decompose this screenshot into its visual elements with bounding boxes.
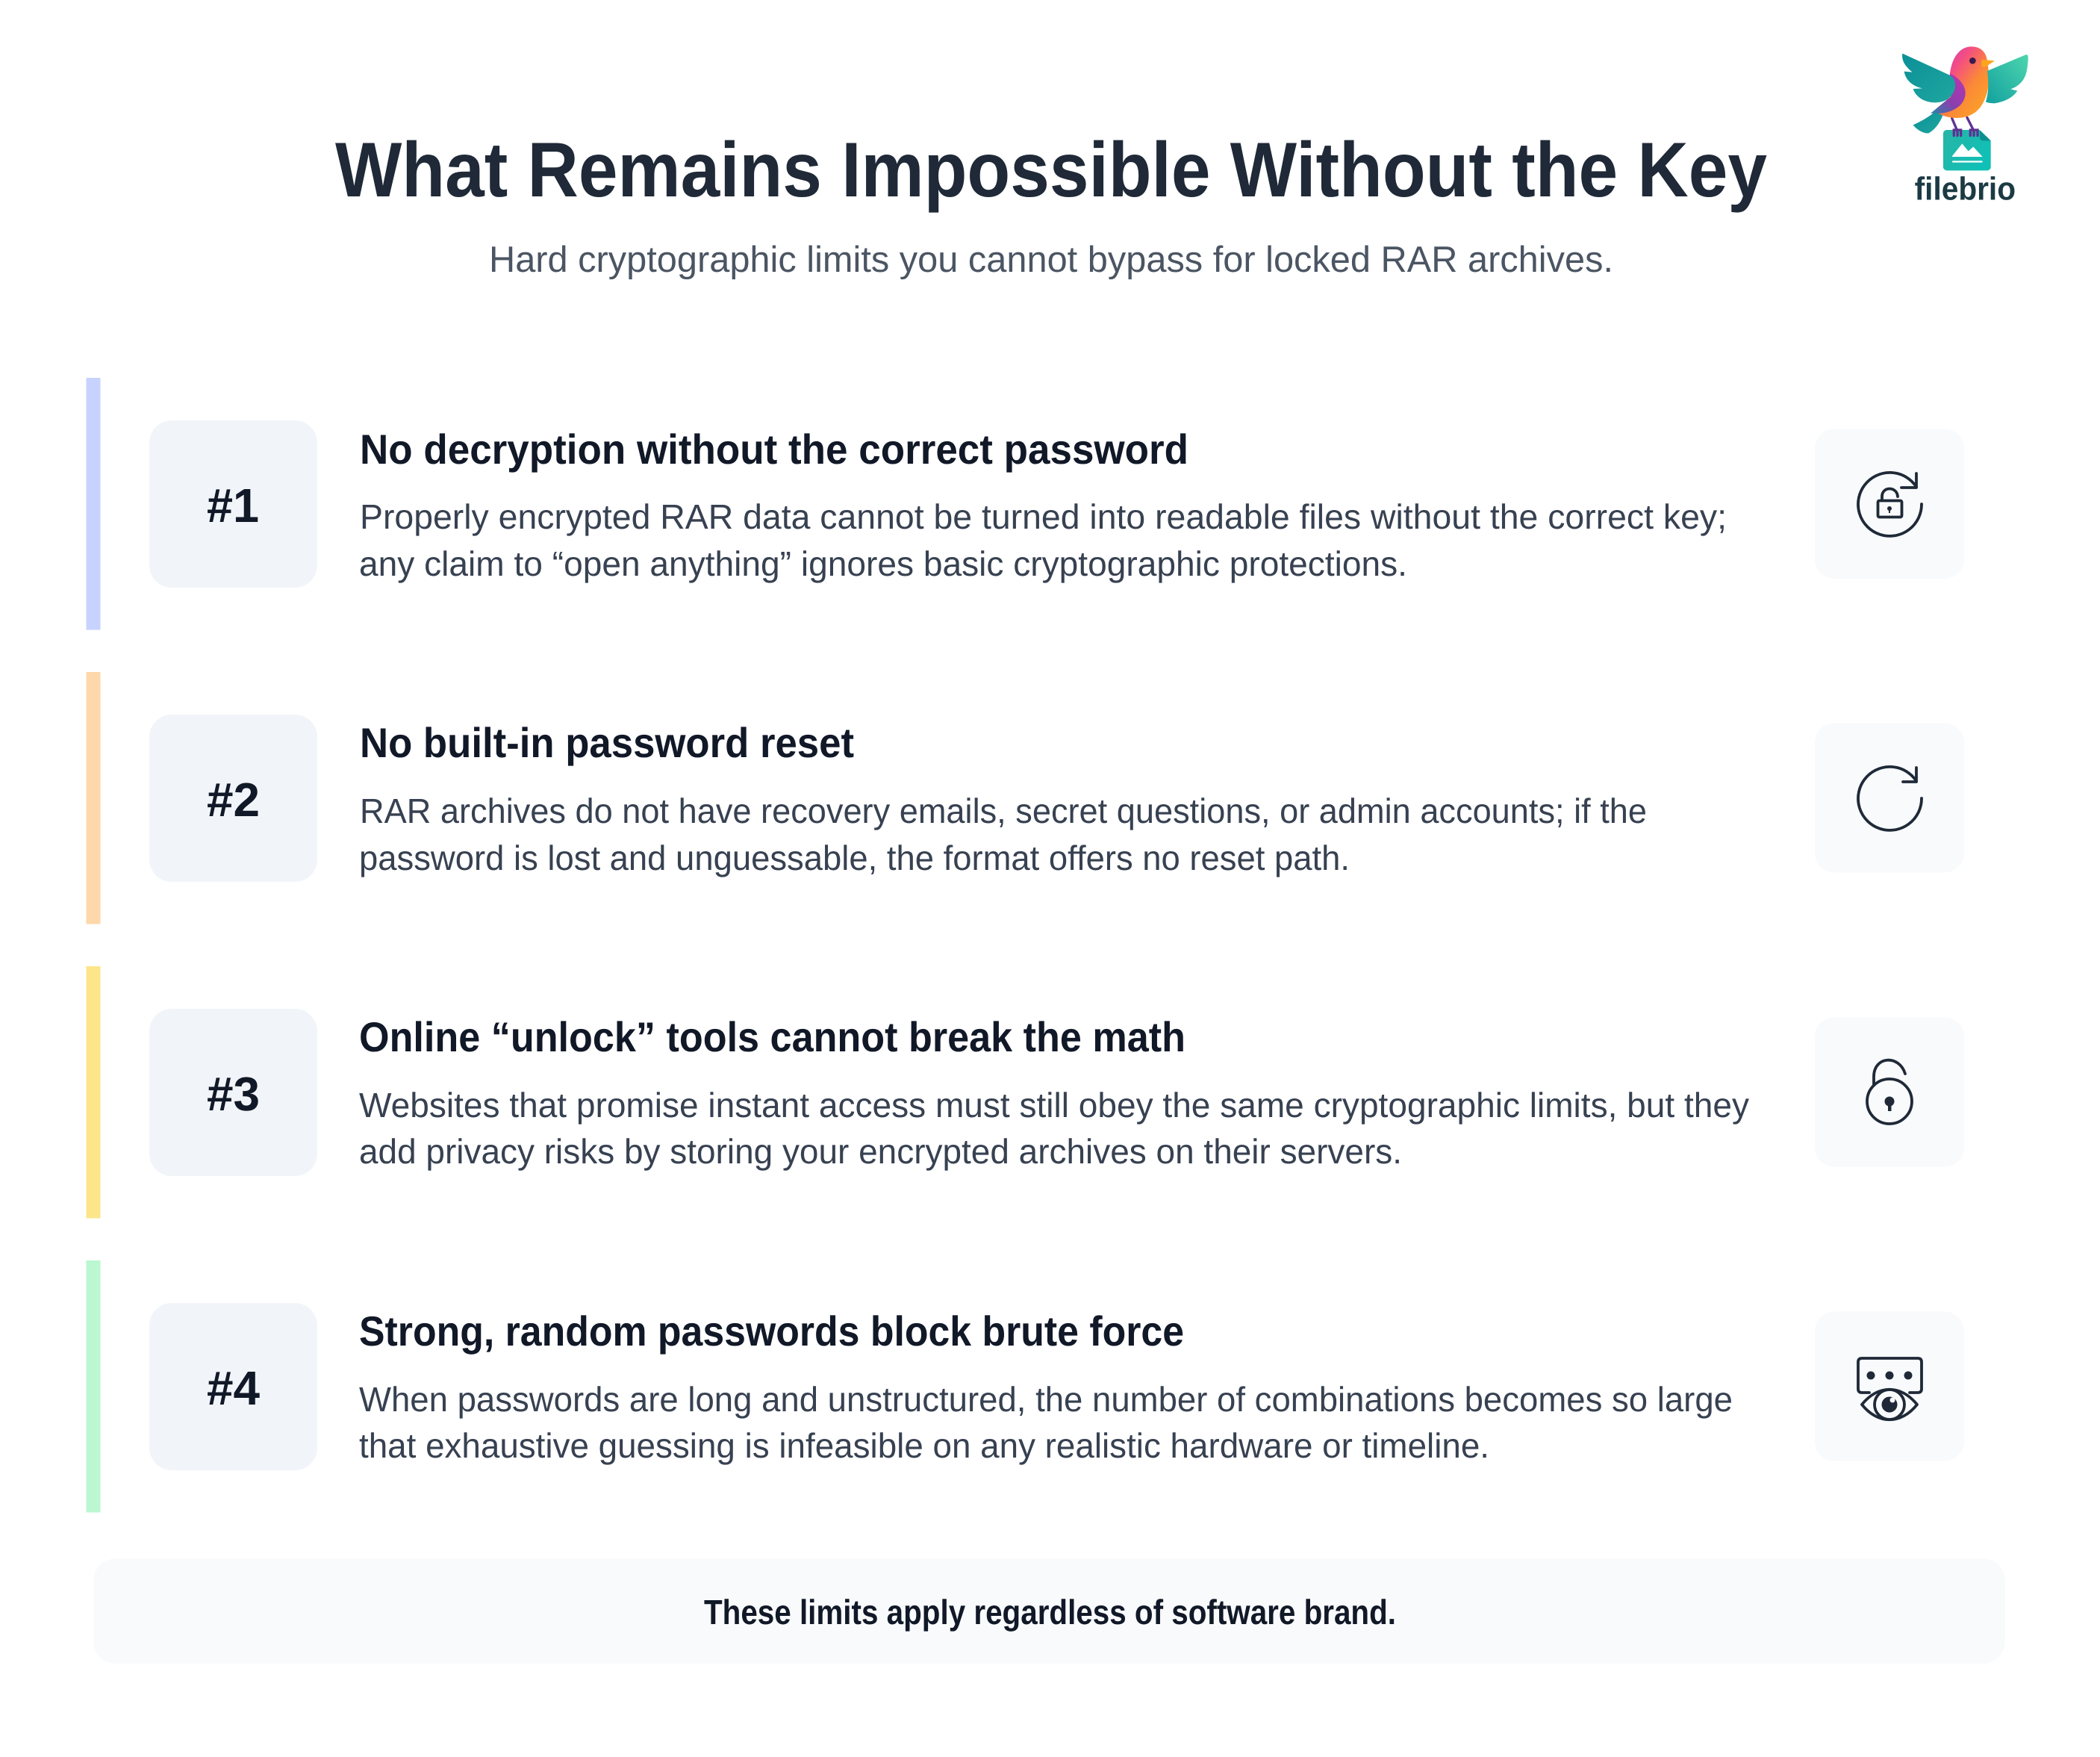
body text 3: add privacy risks by storing your encrypted archives on their servers. xyxy=(359,1132,1402,1171)
panel: item 3 xyxy=(87,966,1964,1219)
body text 2: password is lost and unguessable, the format offers no reset path. xyxy=(359,839,1350,877)
logo wordmark: filebrio xyxy=(1915,170,2016,207)
icon: legs xyxy=(1952,117,1978,136)
icon: right wing xyxy=(1986,55,2028,103)
icon: eye xyxy=(1969,57,1976,64)
body text 1: Properly encrypted RAR data cannot be turned into readable files without the correct key; xyxy=(360,497,1727,536)
title: What Remains Impossible Without the Key xyxy=(335,127,1767,214)
heading 3: Online “unlock” tools cannot break the math xyxy=(359,1013,1185,1060)
body text 1 xyxy=(359,497,1727,583)
heading 2: No built-in password reset xyxy=(360,719,854,766)
subtitle: Hard cryptographic limits you cannot bypass for locked RAR archives. xyxy=(489,240,1613,280)
logo: filebrio bird xyxy=(1902,46,2028,207)
icon: tail xyxy=(1913,111,1943,133)
body text 3 xyxy=(359,1086,1750,1171)
body text 4 xyxy=(359,1380,1733,1465)
icon: file xyxy=(1943,130,1991,170)
icon box: reset arrow xyxy=(1815,723,1964,872)
heading 4: Strong, random passwords block brute force xyxy=(359,1307,1184,1355)
heading 1: No decryption without the correct password xyxy=(360,426,1188,473)
accent bar 2 xyxy=(87,672,100,924)
number badge 1: #1 xyxy=(207,479,259,532)
icon box: password eye xyxy=(1815,1311,1964,1461)
icon: left wing xyxy=(1902,54,1955,102)
icon: bird body xyxy=(1939,46,1989,118)
body text 4: When passwords are long and unstructured, the number of combinations becomes so large xyxy=(359,1380,1733,1419)
body text 1: any claim to “open anything” ignores basic cryptographic protections. xyxy=(359,544,1407,583)
accent bar 1 xyxy=(87,378,100,630)
number badge 1 xyxy=(149,420,317,588)
number badge 4 xyxy=(149,1303,317,1470)
icon box: open padlock xyxy=(1815,1017,1964,1166)
icon: wing stripe xyxy=(1931,73,1966,113)
footer callout xyxy=(93,1559,2005,1664)
accent bar 3 xyxy=(87,966,100,1219)
number badge 4: #4 xyxy=(207,1361,260,1415)
number badge 3 xyxy=(149,1009,317,1176)
number badge 2 xyxy=(149,715,317,882)
panel: item 1 xyxy=(87,378,1964,630)
number badge 2: #2 xyxy=(207,773,260,827)
accent bar 4 xyxy=(87,1260,100,1513)
icon: beak xyxy=(1981,60,1995,67)
panel: item 2 xyxy=(87,672,1964,924)
body text 2: RAR archives do not have recovery emails, secret questions, or admin accounts; if the xyxy=(360,792,1647,830)
number badge 3: #3 xyxy=(207,1067,260,1121)
body text 4: that exhaustive guessing is infeasible on any realistic hardware or timeline. xyxy=(359,1426,1489,1465)
footer callout: These limits apply regardless of software brand. xyxy=(704,1593,1396,1632)
panel: item 4 xyxy=(87,1260,1964,1513)
icon box: unlock cycle xyxy=(1815,429,1964,579)
body text 2 xyxy=(359,792,1647,877)
body text 3: Websites that promise instant access must still obey the same cryptographic limits, but they xyxy=(359,1086,1750,1125)
